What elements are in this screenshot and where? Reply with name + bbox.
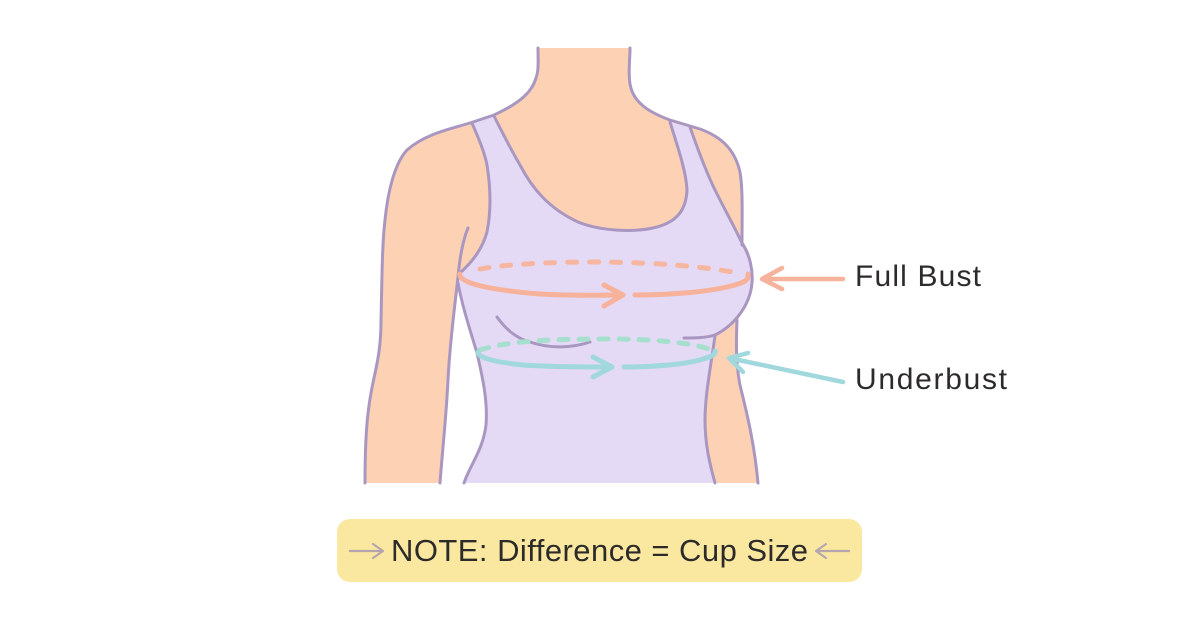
note callout bbox=[337, 519, 862, 582]
note background bbox=[337, 519, 862, 582]
underbust tape measure bbox=[478, 339, 715, 377]
right arm outline bbox=[736, 320, 758, 483]
underbust crease bbox=[497, 317, 590, 347]
full bust dashed back bbox=[480, 262, 738, 273]
right strap and bust outline bbox=[684, 127, 752, 338]
figure: torso wearing tank top bbox=[365, 48, 758, 483]
neck left outline bbox=[470, 48, 538, 123]
neck right and right shoulder outline bbox=[629, 48, 742, 245]
full bust pointer arrow bbox=[762, 268, 843, 289]
inner left arm outline bbox=[440, 228, 468, 483]
underbust label: Underbust bbox=[855, 363, 1008, 396]
left arm outline bbox=[365, 123, 470, 483]
tank top bbox=[458, 116, 752, 483]
underbust front with arrow bbox=[478, 351, 715, 377]
full bust front with arrow bbox=[460, 274, 748, 306]
right note arrow bbox=[816, 544, 849, 558]
underbust pointer arrow bbox=[729, 353, 843, 382]
full bust tape measure bbox=[460, 262, 748, 306]
left strap outer edge bbox=[460, 123, 490, 273]
left side of torso outline bbox=[458, 283, 486, 483]
full bust label: Full Bust bbox=[855, 260, 982, 293]
note text: NOTE: Difference = Cup Size bbox=[391, 533, 808, 568]
left arm and shoulder bbox=[365, 123, 495, 483]
neck and chest skin bbox=[472, 48, 758, 483]
right side of torso outline bbox=[705, 336, 715, 483]
left note arrow bbox=[350, 544, 383, 558]
underbust dashed back bbox=[480, 339, 712, 350]
neckline bbox=[494, 116, 687, 230]
